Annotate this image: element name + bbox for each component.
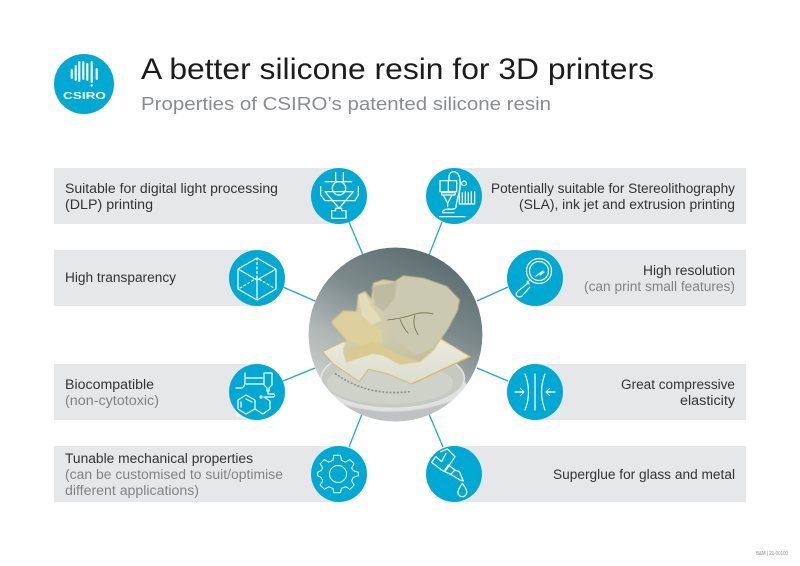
panel: compressive elasticity: Great compressive	[621, 377, 735, 392]
connector lines	[283, 222, 508, 447]
icon: stereolithography printer	[426, 168, 482, 224]
panel: digital light processing	[54, 168, 339, 224]
photo: 3D printed silicone heart in a petri dish	[308, 248, 482, 427]
logo: CSIRO	[54, 54, 114, 114]
panel: tunable mechanical properties: (can be customised to suit/optimise	[65, 467, 283, 482]
panel: stereolithography: Potentially suitable for Stereolithography	[491, 181, 735, 196]
panel: biocompatible	[54, 364, 257, 420]
panel: superglue: Superglue for glass and metal	[553, 467, 735, 482]
panel: compressive elasticity	[535, 364, 746, 420]
icon: compression arrows	[507, 364, 563, 420]
panel: superglue	[454, 446, 746, 502]
printed heart	[332, 276, 459, 364]
footer code: B&M | 21-00100	[756, 551, 788, 557]
panel: high resolution	[535, 250, 746, 306]
panel: tunable mechanical properties: Tunable mechanical properties	[65, 451, 253, 466]
panel: stereolithography: (SLA), ink jet and extrusion printing	[519, 197, 735, 212]
icon: superglue bottle	[426, 446, 482, 502]
logo: CSIRO: CSIRO	[63, 91, 106, 102]
panel: high transparency: High transparency	[65, 270, 176, 285]
panel: biocompatible: (non-cytotoxic)	[65, 393, 159, 408]
panel: tunable mechanical properties: different applications)	[65, 483, 199, 498]
icon: digital light processing	[311, 168, 367, 224]
panel: digital light processing: (DLP) printing	[65, 197, 153, 212]
title: A better silicone resin for 3D printers	[141, 53, 654, 86]
panel: biocompatible: Biocompatible	[65, 377, 154, 392]
panel: high transparency	[54, 250, 257, 306]
coronary veins	[387, 313, 433, 335]
panel: stereolithography	[454, 168, 746, 224]
panel: digital light processing: Suitable for digital light processing	[65, 181, 278, 196]
panel: high resolution: (can print small features)	[584, 279, 735, 294]
petri dish	[318, 338, 470, 427]
icon: biocompatible syringe and molecule	[229, 364, 285, 420]
panel: compressive elasticity: elasticity	[680, 393, 735, 408]
icon: magnifying glass	[507, 250, 563, 306]
icon: transparent cube	[229, 250, 285, 306]
icon: gear	[311, 446, 367, 502]
panel: tunable mechanical properties	[54, 446, 339, 502]
panel: high resolution: High resolution	[643, 263, 735, 278]
subtitle: Properties of CSIRO’s patented silicone resin	[141, 93, 551, 114]
